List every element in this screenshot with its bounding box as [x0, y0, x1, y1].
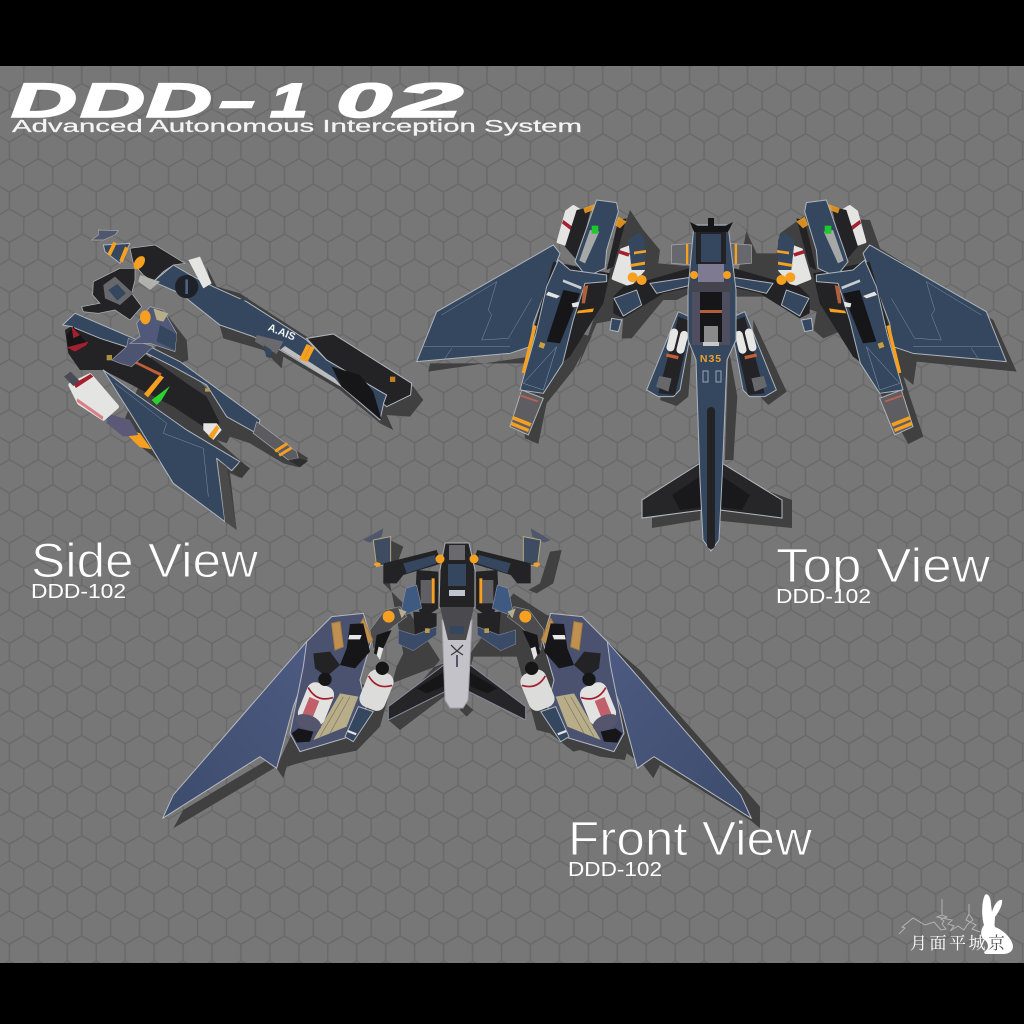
- title: DDD-102: 0: [336, 75, 393, 128]
- label: Front View: DDD-102: [568, 859, 662, 881]
- title block: [11, 75, 582, 136]
- boom: tail section: [153, 257, 412, 420]
- front view centre fuselage: [436, 543, 478, 708]
- top view fuselage: [688, 218, 736, 551]
- tail plane: [388, 662, 448, 720]
- engine outer: [293, 680, 337, 735]
- title: DDD-102: [11, 75, 464, 128]
- tall black spine: [533, 262, 610, 377]
- panel: side view mech: [63, 230, 423, 530]
- logo: rabbit and palace: [899, 894, 1013, 954]
- tan fin stack: [313, 693, 358, 740]
- wing blade: [163, 642, 313, 818]
- logo text: 月面平城京: [910, 934, 1005, 953]
- wing panel: [417, 245, 560, 362]
- title: DDD-102: 2: [392, 75, 464, 128]
- front view cast shadows: [173, 540, 760, 828]
- white engine rear: [613, 245, 643, 285]
- engine: [64, 372, 152, 449]
- top view cast shadows: [428, 210, 1017, 528]
- bottom letterbox bar: [0, 963, 1024, 1024]
- boom marking: A.AIS: A.AIS: [266, 322, 297, 343]
- body: [290, 613, 372, 752]
- missile pod: [647, 312, 693, 397]
- panel: front view mech: [163, 528, 760, 828]
- wing: [103, 370, 240, 522]
- icon: pagoda outline: [899, 899, 980, 934]
- front view right wing assembly: [466, 528, 751, 818]
- engine inner: [357, 667, 396, 714]
- label: Side View: Side View: [31, 535, 258, 588]
- title: DDD-102: D: [146, 75, 212, 128]
- arm and gun: [82, 230, 185, 320]
- top letterbox bar: [0, 0, 1024, 66]
- arm: [613, 268, 697, 318]
- icon: rabbit silhouette: [981, 894, 1013, 954]
- title: DDD-102: -: [218, 75, 256, 128]
- connecting arm: [370, 607, 407, 650]
- gun arm: [363, 528, 383, 543]
- fuselage nose: [575, 200, 618, 277]
- top view left wing assembly: [417, 200, 697, 435]
- foot: [345, 707, 373, 742]
- main hull: [63, 307, 308, 530]
- label: Front View: Front View: [568, 813, 812, 866]
- shoulder: [130, 307, 177, 352]
- top view tail plane: [642, 462, 782, 518]
- inner black bay: [607, 218, 627, 270]
- title: DDD-102: D: [80, 75, 145, 128]
- label: Top View: DDD-102: [776, 586, 871, 608]
- panel: top view mech: [417, 200, 1017, 551]
- fuselage aft: [520, 260, 607, 393]
- title: DDD-102: D: [11, 75, 77, 128]
- title: DDD-102: 1: [270, 75, 308, 128]
- marking: N35: N35: [700, 353, 722, 365]
- side view cast shadow: [120, 267, 423, 530]
- shoulder: [415, 570, 438, 618]
- label: Top View: Top View: [776, 540, 990, 593]
- front view left wing assembly: [163, 528, 448, 818]
- tail nose: [510, 390, 543, 435]
- top view right wing assembly: [726, 200, 1006, 435]
- label: Side View: DDD-102: [31, 581, 126, 603]
- subtitle: Advanced Autonomous Interception System: [12, 116, 582, 136]
